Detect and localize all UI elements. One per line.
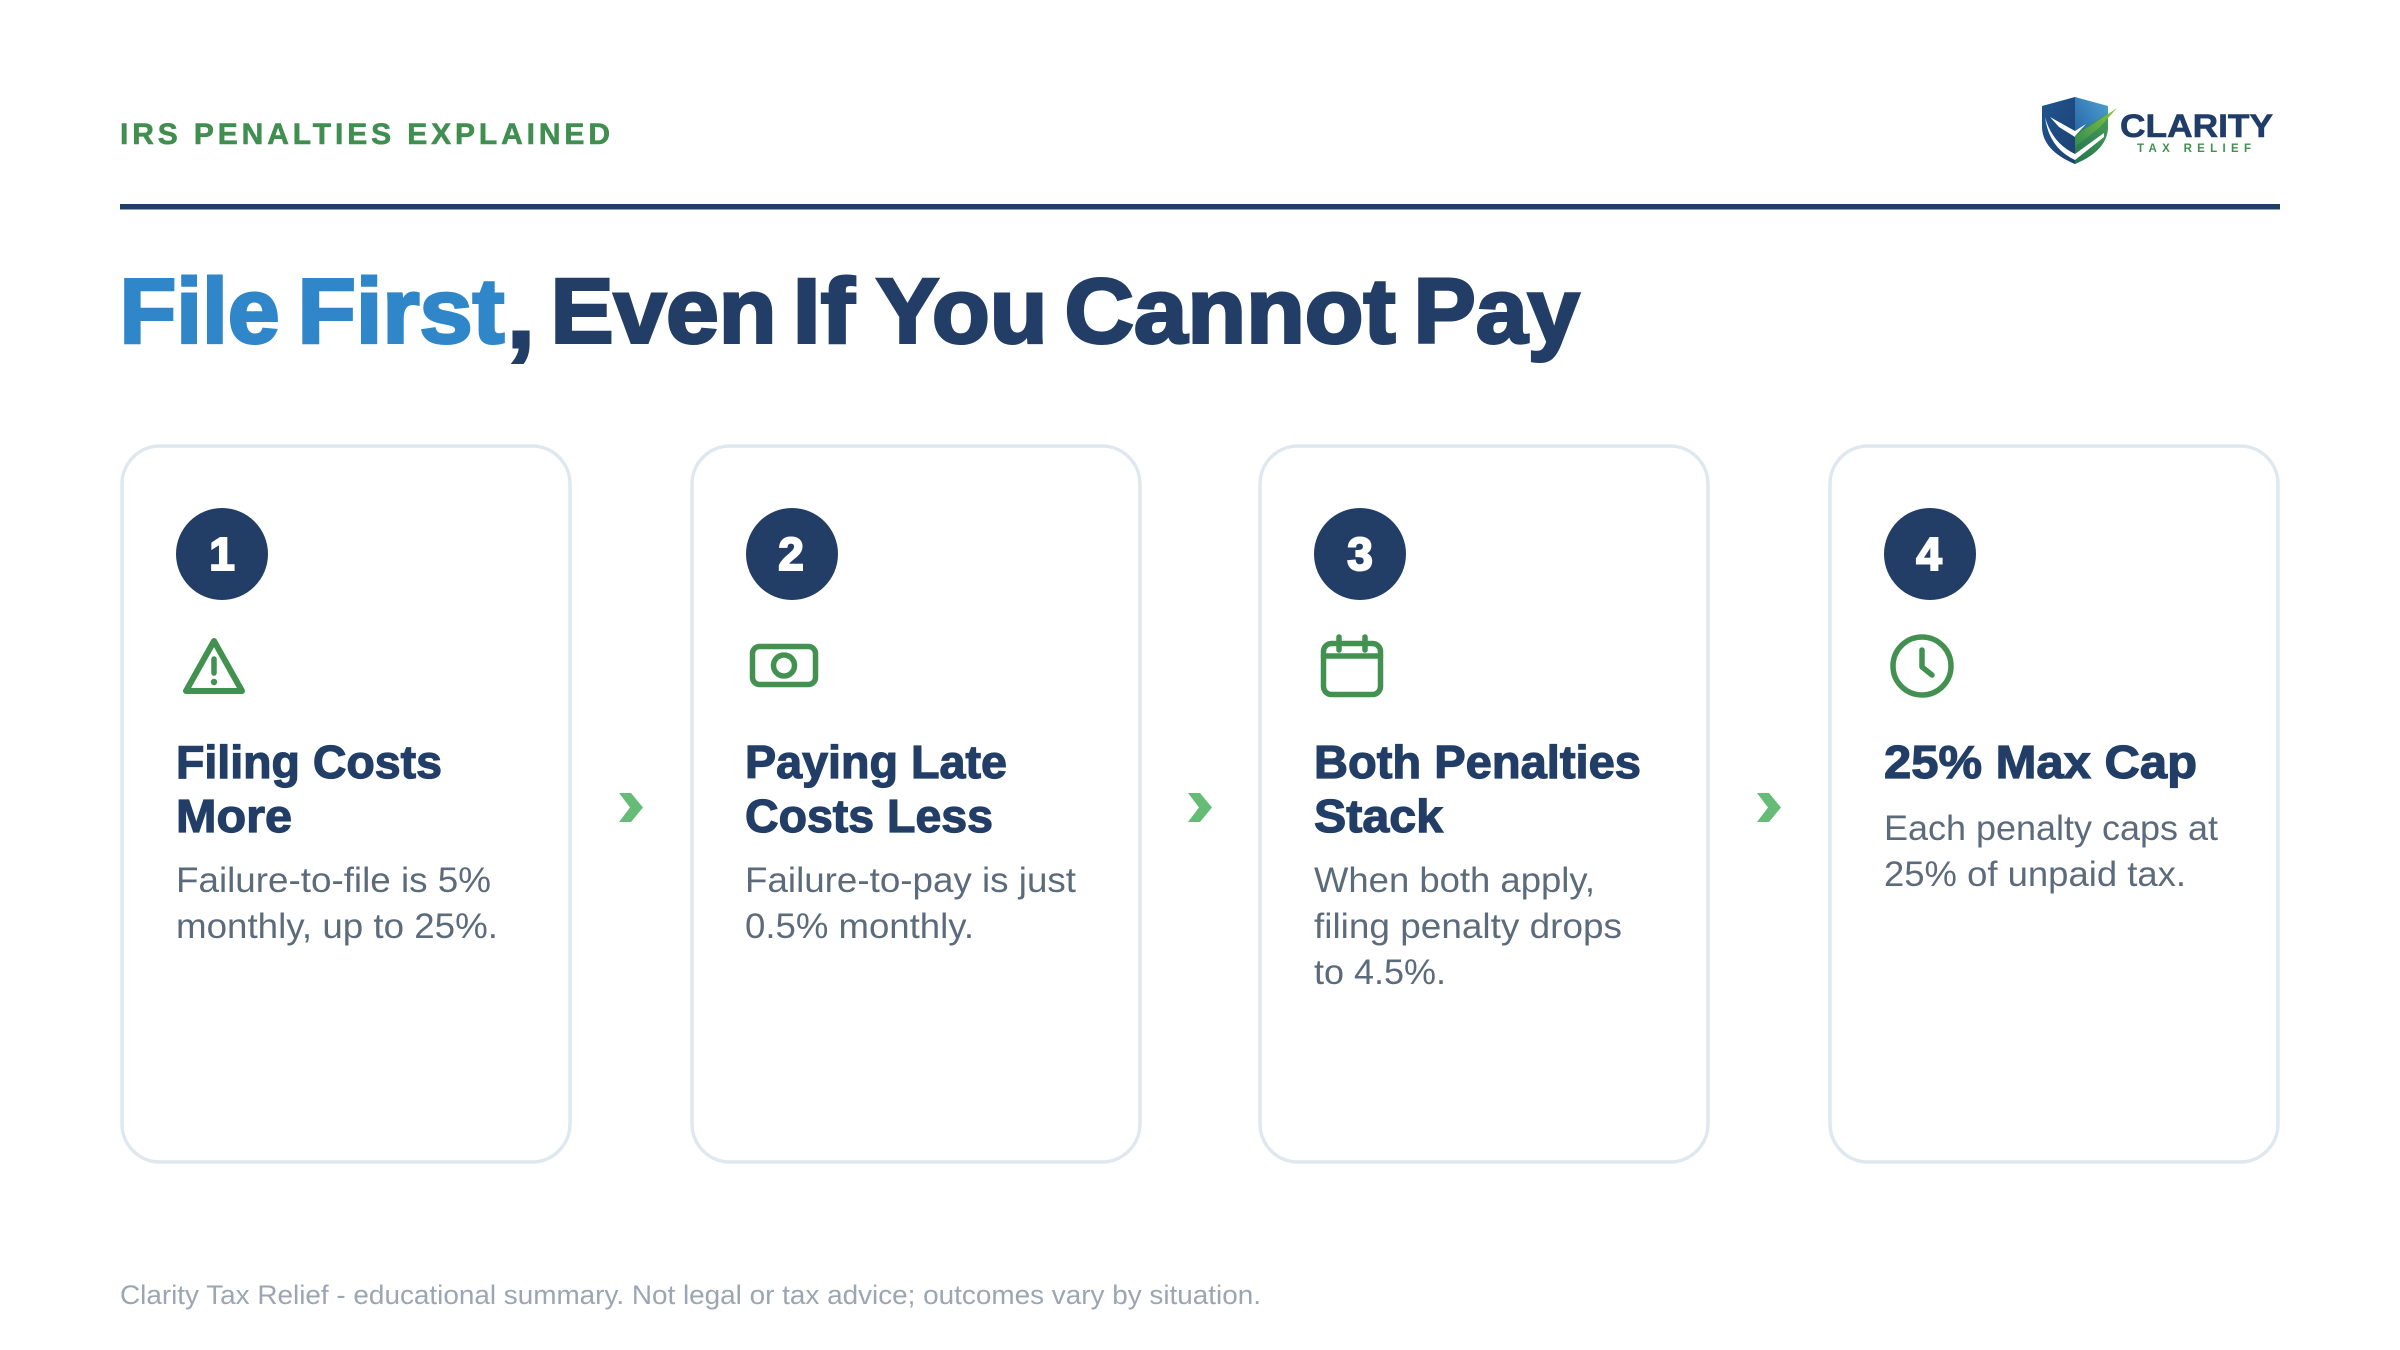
body text: Each penalty caps at bbox=[1884, 809, 2218, 848]
arrow 2 bbox=[1188, 793, 1212, 822]
logo: Clarity Tax Relief bbox=[2040, 95, 2273, 168]
heading: filing costs more: Filing Costs bbox=[176, 736, 442, 788]
panel: step 1 filing costs more bbox=[122, 446, 570, 1162]
icon: calendar bbox=[1324, 637, 1380, 694]
body text: When both apply, bbox=[1314, 861, 1595, 900]
body text: 25% of unpaid tax. bbox=[1884, 855, 2186, 894]
title: If bbox=[792, 260, 855, 362]
step number 2 bbox=[746, 508, 838, 600]
title: Even bbox=[550, 260, 776, 362]
title: Pay bbox=[1414, 260, 1580, 362]
step number 2: 2 bbox=[778, 528, 804, 580]
title: Cannot bbox=[1064, 260, 1396, 362]
step number 1 bbox=[176, 508, 268, 600]
title bbox=[120, 257, 1580, 369]
body text: Failure-to-file is 5% bbox=[176, 861, 491, 900]
body text: Failure-to-pay is just bbox=[745, 861, 1076, 900]
arrow 3 bbox=[1757, 793, 1781, 822]
icon: warning triangle bbox=[186, 641, 242, 691]
footer disclaimer: Clarity Tax Relief - educational summary. Not legal or tax advice; outcomes vary by situation. bbox=[120, 1280, 1261, 1310]
panel: step 2 paying late costs less bbox=[692, 446, 1140, 1162]
title: First bbox=[298, 260, 504, 362]
logo tagline: TAX RELIEF bbox=[2137, 143, 2251, 155]
body text: monthly, up to 25%. bbox=[176, 907, 498, 946]
logo shield icon bbox=[2042, 97, 2117, 164]
body text: filing penalty drops bbox=[1314, 907, 1622, 946]
panel: step 4 max cap bbox=[1830, 446, 2278, 1162]
heading: paying late costs less: Paying Late bbox=[745, 736, 1007, 788]
heading: both penalties stack: Stack bbox=[1314, 790, 1443, 842]
title: , bbox=[507, 257, 535, 369]
heading: paying late costs less: Costs Less bbox=[745, 790, 993, 842]
step number 4 bbox=[1884, 508, 1976, 600]
heading: both penalties stack: Both Penalties bbox=[1314, 736, 1641, 788]
logo upper check swoosh bbox=[2050, 117, 2086, 137]
eyebrow heading: IRS PENALTIES EXPLAINED bbox=[120, 118, 610, 151]
icon: clock bbox=[1893, 637, 1951, 695]
logo wordmark: CLARITY bbox=[2120, 108, 2273, 144]
title: File bbox=[120, 260, 280, 362]
title: You bbox=[876, 260, 1048, 362]
step number 4: 4 bbox=[1916, 528, 1942, 580]
panel: step 3 both penalties stack bbox=[1260, 446, 1708, 1162]
header rule bbox=[120, 204, 2280, 210]
icon: banknote bbox=[752, 646, 816, 684]
heading: 25% max cap: 25% Max Cap bbox=[1884, 736, 2197, 788]
step number 1: 1 bbox=[209, 528, 235, 580]
heading: filing costs more: More bbox=[176, 790, 292, 842]
step number 3 bbox=[1314, 508, 1406, 600]
body text: 0.5% monthly. bbox=[745, 907, 974, 946]
step number 3: 3 bbox=[1347, 528, 1373, 580]
arrow 1 bbox=[619, 793, 643, 822]
body text: to 4.5%. bbox=[1314, 953, 1446, 992]
